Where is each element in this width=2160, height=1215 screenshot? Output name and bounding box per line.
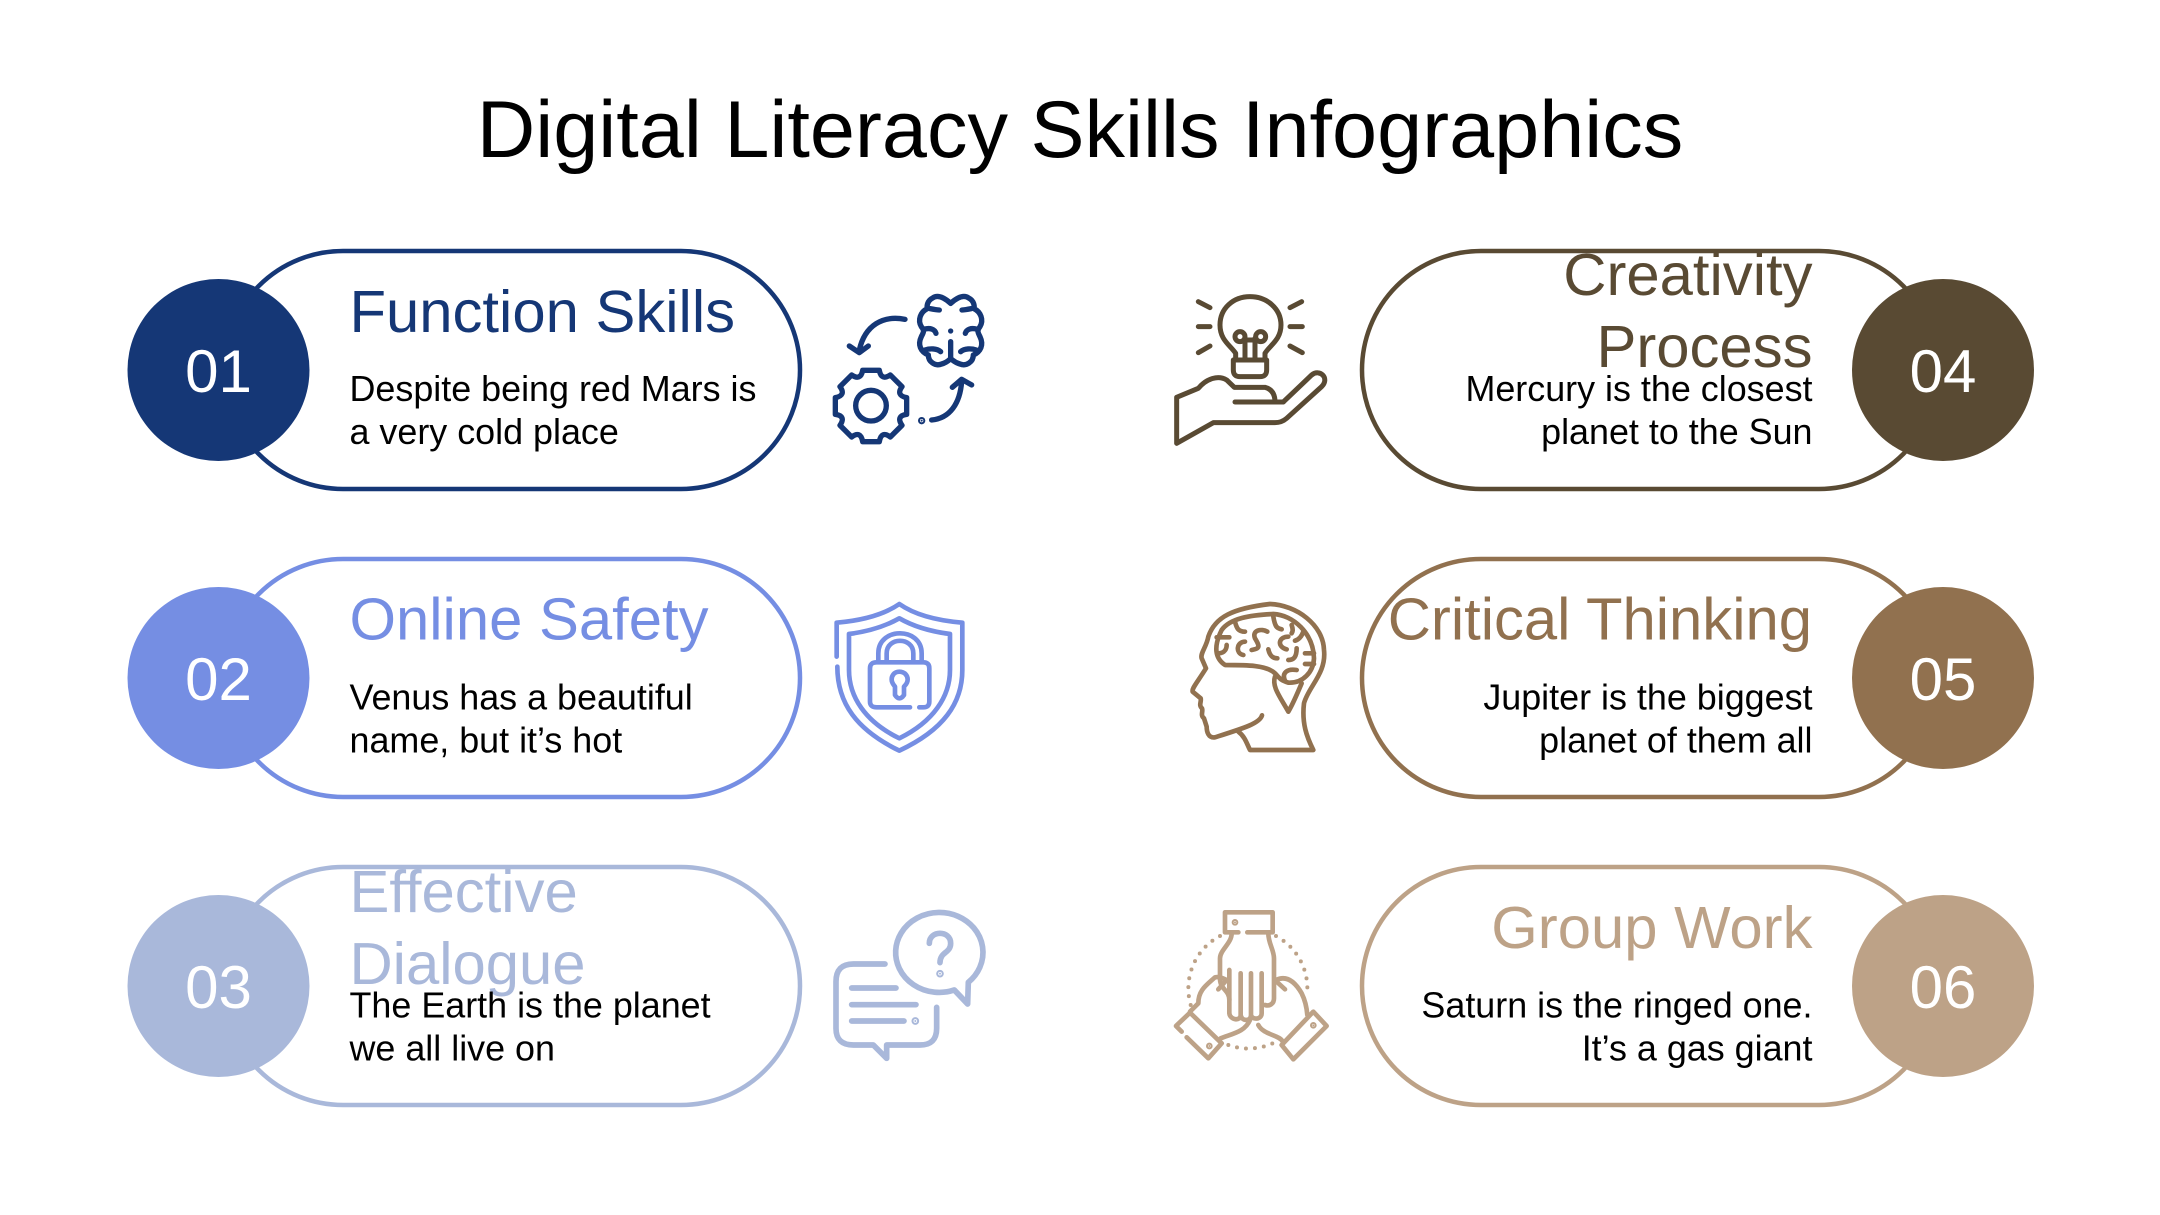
number badge 02: 02: [185, 646, 252, 713]
description 01: Despite being red Mars is: [350, 369, 756, 409]
description 04: Mercury is the closest: [1465, 369, 1813, 409]
description 02: name, but it’s hot: [350, 720, 622, 760]
pill outline 06: [1362, 867, 1938, 1105]
description 02: Venus has a beautiful: [350, 678, 693, 718]
pill outline 01: [224, 251, 800, 489]
number badge 06: 06: [1910, 954, 1976, 1021]
panel: 06 Group Work: [1362, 867, 2034, 1105]
description 01: a very cold place: [350, 412, 619, 452]
heading 03: Effective: [350, 858, 578, 925]
pill outline 02: [224, 559, 800, 797]
heading 02: Online Safety: [350, 586, 709, 652]
icon: speech bubbles with question: [836, 912, 983, 1058]
pill outline 05: [1362, 559, 1938, 797]
panel: 02 Online Safety: [128, 559, 800, 797]
pill outline 03: [224, 867, 800, 1105]
description 05: Jupiter is the biggest: [1483, 678, 1813, 718]
number badge 01: 01: [185, 338, 252, 405]
heading 04: Creativity: [1563, 241, 1813, 308]
number badge 03: 03: [185, 954, 252, 1021]
description 03: we all live on: [348, 1028, 555, 1068]
panel: 05 Critical Thinking: [1362, 559, 2034, 797]
description 05: [1483, 678, 1813, 760]
pill outline 04: [1362, 251, 1938, 489]
description 05: planet of them all: [1539, 720, 1812, 760]
panel: 04 Creativity Process: [1362, 241, 2034, 489]
icon: hand holding light bulb: [1177, 297, 1325, 443]
number badge 03: [128, 895, 310, 1077]
heading 04: [1563, 241, 1813, 380]
number badge 04: [1852, 279, 2034, 461]
heading 06: Group Work: [1491, 894, 1813, 961]
panel: 03 Effective Dialogue: [128, 858, 800, 1105]
number badge 02: [128, 587, 310, 769]
description 02: [350, 678, 693, 760]
title: Digital Literacy Skills Infographics: [477, 85, 1683, 175]
heading 05: Critical Thinking: [1388, 586, 1812, 652]
description 01: [350, 369, 756, 452]
heading 03: [350, 858, 586, 997]
number badge 05: [1852, 587, 2034, 769]
number badge 06: [1852, 895, 2034, 1077]
description 03: [348, 986, 711, 1068]
number badge 05: 05: [1910, 646, 1976, 713]
panel: 01 Function Skills: [128, 251, 800, 489]
description 03: The Earth is the planet: [350, 986, 711, 1026]
description 06: [1421, 986, 1813, 1068]
number badge 04: 04: [1910, 338, 1976, 405]
heading 03: Dialogue: [350, 930, 586, 997]
heading 04: Process: [1596, 313, 1812, 380]
description 06: It’s a gas giant: [1582, 1028, 1813, 1068]
icon: brain and gear cycle: [835, 296, 982, 442]
description 04: planet to the Sun: [1541, 412, 1812, 452]
icon: shield with padlock: [837, 604, 962, 751]
icon: three joined hands: [1176, 912, 1327, 1059]
description 06: Saturn is the ringed one.: [1421, 986, 1812, 1026]
description 04: [1465, 369, 1813, 452]
heading 01: Function Skills: [350, 278, 735, 345]
number badge 01: [128, 279, 310, 461]
icon: head with brain: [1193, 604, 1324, 750]
